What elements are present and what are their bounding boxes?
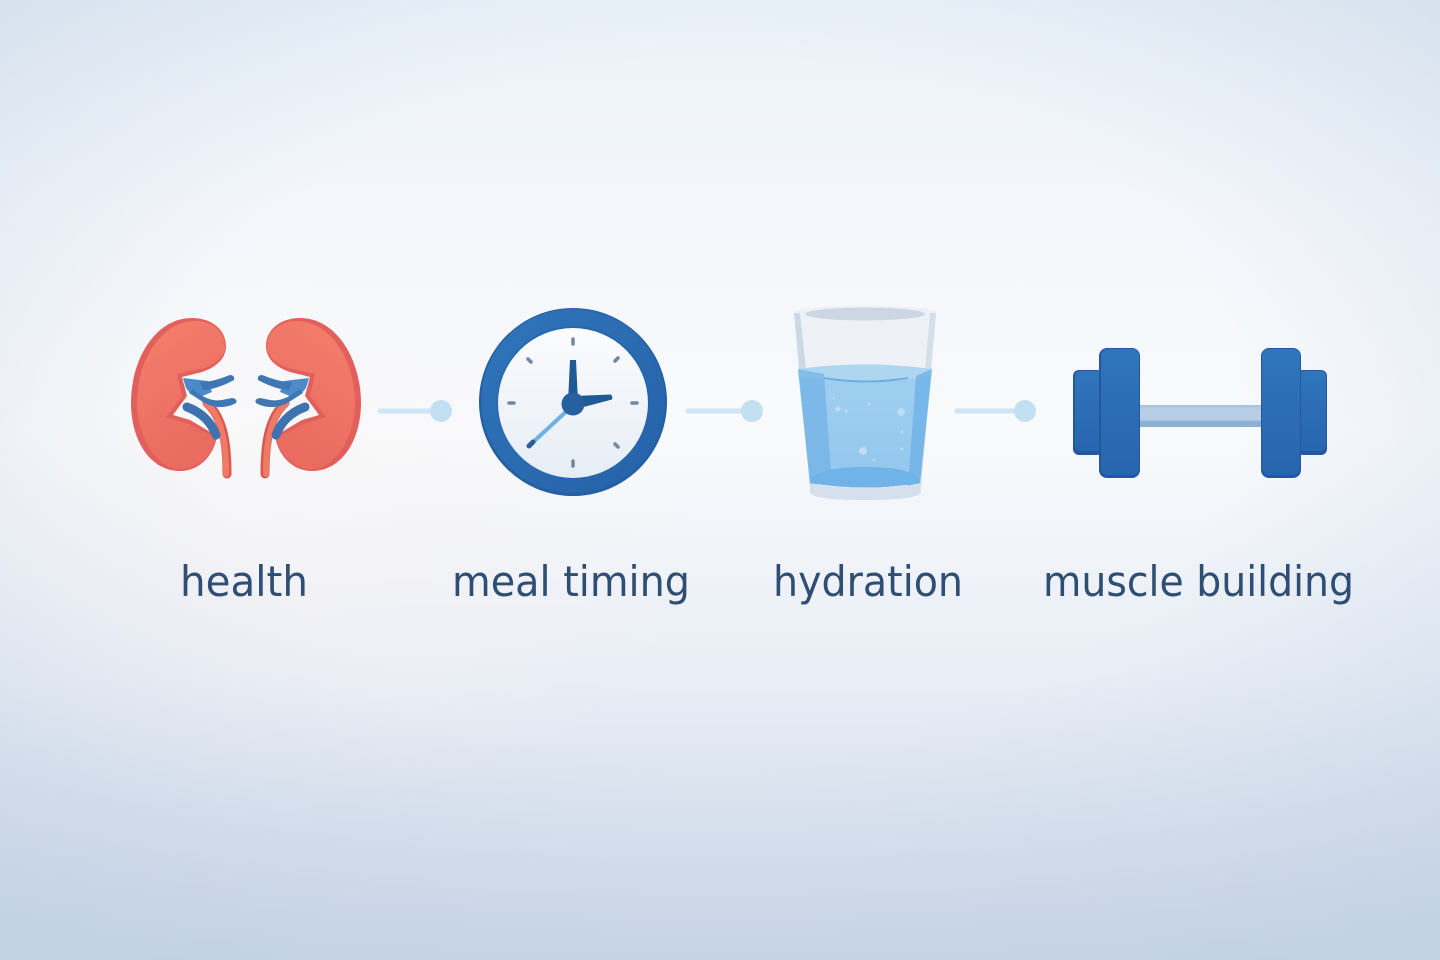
label: health: health [180,557,308,606]
icon: kidneys [131,318,361,474]
connector: glass to dumbbell [957,400,1036,422]
label: meal timing: meal timing [452,557,690,606]
icon: glass of water [794,306,936,500]
icon: dumbbell [1073,348,1327,478]
label: hydration: hydration [773,557,963,606]
connector: kidneys to clock [380,400,452,422]
label: muscle building: muscle building [1043,557,1354,606]
icon: clock [479,308,667,496]
connector: clock to glass [688,400,763,422]
